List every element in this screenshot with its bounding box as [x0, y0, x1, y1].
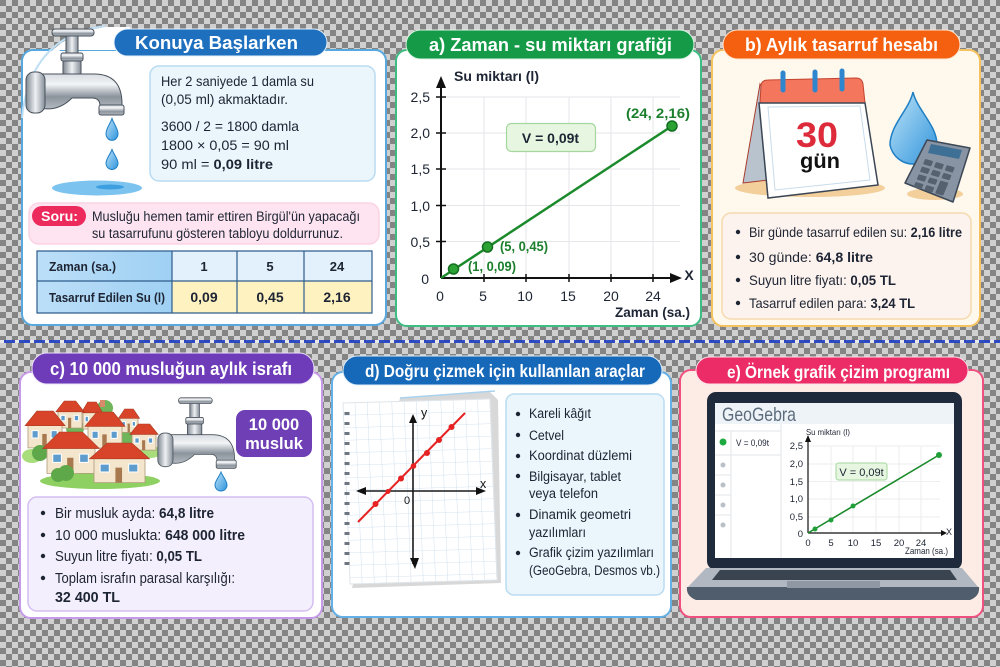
- icon: dripping faucet: [26, 29, 142, 196]
- list: araçlar: Dinamik geometri: [529, 507, 631, 522]
- list: tasarruf hesabı: [722, 213, 971, 319]
- icon: dizüstü bilgisayar: V = 0,09t: [736, 438, 769, 449]
- list: araçlar: Bilgisayar, tablet: [529, 469, 621, 484]
- label: 10 000 musluk: 10 000: [249, 416, 299, 434]
- icon: kareli kâğıtta doğru grafiği: y: [421, 406, 428, 420]
- icon: dizüstü bilgisayar: [687, 392, 979, 600]
- list: araçlar: veya telefon: [529, 486, 598, 501]
- icon: takvim 30 gün: gün: [800, 150, 840, 173]
- list: araçlar: [506, 394, 664, 595]
- panel: b) Aylık tasarruf hesabı: [712, 30, 980, 326]
- heading: a): [406, 30, 694, 59]
- icon: su damlası: [890, 92, 937, 164]
- heading: c): [32, 353, 314, 384]
- heading: e): e) Örnek grafik çizim programı: [727, 362, 950, 382]
- chart: zaman - su miktarı: 0,5: [411, 234, 430, 250]
- chart: GeoGebra grafiği: 0: [798, 529, 803, 540]
- chart: zaman - su miktarı: 5: [479, 288, 487, 304]
- heading: b): [723, 30, 960, 59]
- chart: GeoGebra grafiği: 24: [916, 538, 926, 549]
- label: 10 000 musluk: musluk: [245, 435, 304, 453]
- list: araçlar: Koordinat düzlemi: [529, 448, 632, 463]
- text block: damla hesabı: 90 ml = 0,09 litre: [161, 156, 273, 172]
- chart: GeoGebra grafiği: 0,5: [790, 512, 803, 523]
- chart: GeoGebra grafiği: 2,5: [790, 441, 803, 452]
- panel: e) Örnek grafik çizim programı: [680, 357, 983, 617]
- chart: zaman - su miktarı: Zaman (sa.): [615, 304, 690, 320]
- chart: zaman - su miktarı: 2,5: [411, 89, 430, 105]
- heading: d): [343, 356, 662, 385]
- list: tasarruf hesabı: Tasarruf edilen para: 3,24 TL: [749, 295, 915, 311]
- chart: GeoGebra grafiği: 1,5: [790, 477, 803, 488]
- heading: d): d) Doğru çizmek için kullanılan araçlar: [365, 361, 645, 381]
- chart: GeoGebra grafiği: X: [946, 527, 952, 537]
- heading: Konuya Başlarken: Konuya Başlarken: [135, 32, 298, 53]
- table: zaman ve tasarruf edilen su: 24: [330, 259, 345, 274]
- chart: GeoGebra grafiği: 5: [828, 538, 834, 549]
- chart: zaman - su miktarı: (24, 2,16): [626, 106, 690, 121]
- chart: GeoGebra grafiği: 20: [894, 538, 904, 549]
- list: tasarruf hesabı: Bir günde tasarruf edilen su: 2,16 litre: [749, 224, 962, 240]
- list: israf hesabı: 10 000 muslukta: 648 000 litre: [55, 528, 245, 544]
- table: zaman ve tasarruf edilen su: Zaman (sa.): [49, 259, 116, 274]
- icon: hesap makinesi: [905, 140, 970, 202]
- chart: zaman - su miktarı: (5, 0,45): [500, 239, 548, 254]
- chart: zaman - su miktarı: 20: [603, 288, 619, 304]
- chart: GeoGebra grafiği: 2,0: [790, 459, 803, 470]
- heading: e): [696, 357, 968, 384]
- chart: zaman - su miktarı: 1,5: [411, 161, 430, 177]
- table: zaman ve tasarruf edilen su: 0,09: [190, 289, 218, 305]
- text block: damla hesabı: [150, 66, 375, 181]
- chart: zaman - su miktarı: X: [684, 267, 694, 283]
- heading: a): a) Zaman - su miktarı grafiği: [429, 35, 672, 55]
- panel: c) 10 000 musluğun aylık israfı: [20, 353, 322, 618]
- heading: Konuya Başlarken: [114, 29, 327, 56]
- table: zaman ve tasarruf edilen su: 1: [200, 259, 208, 274]
- chart: zaman - su miktarı: 24: [645, 288, 661, 304]
- table: zaman ve tasarruf edilen su: [37, 251, 372, 313]
- chart: GeoGebra grafiği: Su miktarı (l): [806, 427, 850, 437]
- chart: zaman - su miktarı: 0: [436, 288, 444, 304]
- chart: GeoGebra grafiği: 15: [871, 538, 881, 549]
- list: araçlar: (GeoGebra, Desmos vb.): [529, 563, 660, 578]
- icon: takvim 30 gün: [735, 71, 885, 198]
- text block: damla hesabı: Her 2 saniyede 1 damla su: [161, 73, 314, 89]
- callout: Soru: Soru:: [41, 209, 78, 224]
- icon: musluk: [158, 398, 236, 491]
- chart: GeoGebra grafiği: Zaman (sa.): [905, 546, 948, 557]
- text block: damla hesabı: 1800 × 0,05 = 90 ml: [161, 137, 289, 153]
- chart: zaman - su miktarı: Su miktarı (l): [454, 69, 539, 84]
- chart: zaman - su miktarı: 15: [560, 288, 576, 304]
- table: zaman ve tasarruf edilen su: 5: [266, 259, 274, 274]
- callout: Soru: Musluğu hemen tamir ettiren Birgül'ün yapacağı: [92, 209, 360, 224]
- list: araçlar: Cetvel: [529, 428, 564, 443]
- text: GeoGebra logosu: GeoGebra: [722, 404, 796, 426]
- list: araçlar: Grafik çizim yazılımları: [529, 545, 654, 560]
- icon: evler: [22, 400, 162, 489]
- list: israf hesabı: Bir musluk ayda: 64,8 litre: [55, 506, 214, 522]
- list: israf hesabı: [28, 497, 313, 611]
- panel: d) Doğru çizmek için kullanılan araçlar: [332, 356, 671, 617]
- chart: zaman - su miktarı: 10: [517, 288, 533, 304]
- text block: damla hesabı: 3600 / 2 = 1800 damla: [161, 118, 299, 134]
- icon: kareli kâğıtta doğru grafiği: 0: [404, 495, 410, 507]
- chart: zaman - su miktarı: 0: [421, 271, 429, 287]
- callout: Soru: [29, 203, 379, 244]
- chart: zaman - su miktarı: 2,0: [411, 125, 430, 141]
- chart: zaman - su miktarı: 1,0: [411, 198, 430, 214]
- icon: kareli kâğıtta doğru grafiği: [343, 391, 501, 588]
- icon: kareli kâğıtta doğru grafiği: x: [480, 477, 487, 491]
- list: israf hesabı: Suyun litre fiyatı: 0,05 TL: [55, 549, 202, 565]
- callout: Soru: su tasarrufunu gösteren tabloyu doldurrunuz.: [92, 226, 343, 241]
- panel: a) Zaman - su miktarı grafiği: [396, 30, 701, 326]
- chart: GeoGebra grafiği: [790, 427, 952, 557]
- list: israf hesabı: Toplam israfın parasal karşılığı:: [55, 571, 235, 587]
- chart: zaman - su miktarı: [411, 69, 694, 320]
- chart: zaman - su miktarı: (1, 0,09): [468, 259, 516, 274]
- heading: c): c) 10 000 musluğun aylık israfı: [50, 359, 292, 379]
- label: 10 000 musluk: [236, 410, 312, 457]
- table: zaman ve tasarruf edilen su: Tasarruf Edilen Su (l): [49, 290, 165, 305]
- list: israf hesabı: 32 400 TL: [55, 590, 120, 606]
- chart: GeoGebra grafiği: V = 0,09t: [839, 467, 884, 479]
- list: tasarruf hesabı: 30 günde: 64,8 litre: [749, 249, 873, 265]
- table: zaman ve tasarruf edilen su: 0,45: [256, 289, 284, 305]
- chart: GeoGebra grafiği: 1,0: [790, 494, 803, 505]
- list: tasarruf hesabı: Suyun litre fiyatı: 0,05 TL: [749, 272, 896, 288]
- text block: damla hesabı: (0,05 ml) akmaktadır.: [161, 91, 288, 107]
- list: araçlar: Kareli kâğıt: [529, 406, 591, 421]
- icon: takvim 30 gün: 30: [796, 116, 838, 155]
- chart: zaman - su miktarı: V = 0,09t: [522, 130, 579, 146]
- panel: Konuya Başlarken: [22, 26, 386, 325]
- chart: GeoGebra grafiği: 0: [805, 538, 811, 549]
- table: zaman ve tasarruf edilen su: 2,16: [323, 289, 351, 305]
- chart: GeoGebra grafiği: 10: [848, 538, 858, 549]
- heading: b): b) Aylık tasarruf hesabı: [745, 35, 938, 55]
- list: araçlar: yazılımları: [529, 525, 586, 540]
